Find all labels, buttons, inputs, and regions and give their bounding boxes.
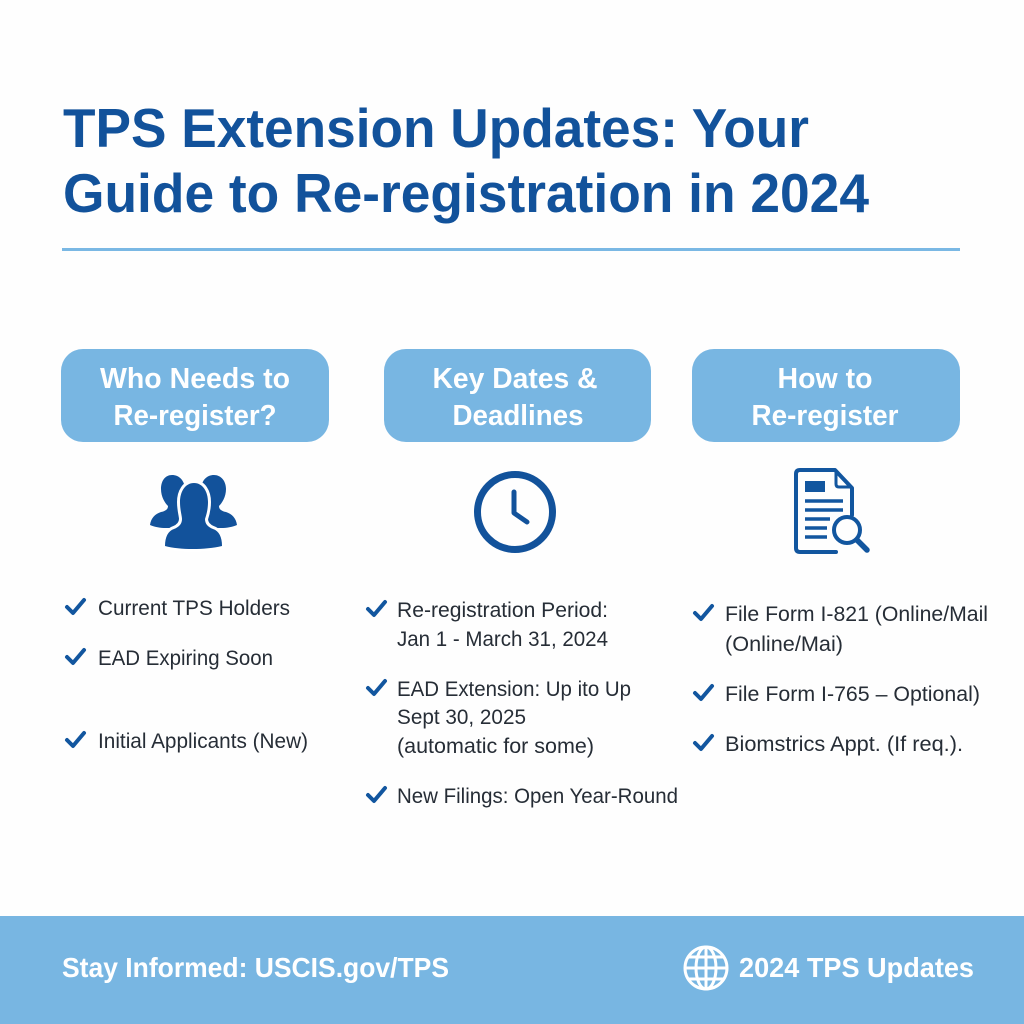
icon: document with magnifier bbox=[796, 470, 867, 552]
checklist: dates bbox=[368, 599, 678, 808]
checklist: dates: EAD Extension: Up ito Up bbox=[397, 678, 631, 701]
checklist: who bbox=[67, 597, 308, 753]
heading pill: how: How to bbox=[778, 363, 872, 395]
checklist: dates: New Filings: Open Year-Round bbox=[397, 785, 678, 808]
footer text: stay informed: Stay Informed: USCIS.gov/TPS bbox=[62, 952, 449, 983]
checklist: dates: (automatic for some) bbox=[397, 735, 594, 758]
checklist: who: Initial Applicants (New) bbox=[98, 730, 308, 753]
checklist: how: Biomstrics Appt. (If req.). bbox=[725, 733, 963, 756]
icon: people bbox=[150, 475, 237, 549]
checklist: dates: Jan 1 - March 31, 2024 bbox=[397, 628, 608, 651]
heading pill: dates: Deadlines bbox=[452, 400, 584, 432]
checklist: dates: Re-registration Period: bbox=[397, 599, 608, 622]
checklist: how: File Form I-765 – Optional) bbox=[725, 683, 980, 706]
heading pill: how: Re-register bbox=[752, 400, 898, 432]
icon: clock bbox=[478, 474, 552, 550]
checklist: who: EAD Expiring Soon bbox=[98, 647, 273, 670]
footer text: 2024 updates: 2024 TPS Updates bbox=[739, 952, 974, 983]
title: TPS Extension Updates: Your bbox=[63, 97, 809, 159]
title: Guide to Re-registration in 2024 bbox=[63, 162, 869, 224]
heading pill: dates bbox=[384, 349, 651, 442]
checklist: how bbox=[695, 603, 988, 756]
checklist: how: (Online/Mai) bbox=[725, 633, 843, 656]
heading pill: how bbox=[692, 349, 960, 442]
panel: key dates and deadlines bbox=[368, 349, 678, 808]
heading pill: dates: Key Dates & bbox=[432, 363, 598, 395]
panel: how to re-register bbox=[692, 349, 988, 756]
heading pill: who bbox=[61, 349, 329, 442]
title bbox=[63, 97, 869, 224]
heading pill: who: Re-register? bbox=[114, 400, 276, 432]
icon: globe bbox=[685, 947, 727, 989]
checklist: dates: Sept 30, 2025 bbox=[397, 706, 526, 729]
heading pill: who: Who Needs to bbox=[100, 363, 290, 395]
panel: who needs to re-register bbox=[61, 349, 329, 753]
footer band bbox=[0, 916, 1024, 1024]
checklist: who: Current TPS Holders bbox=[98, 597, 290, 620]
checklist: how: File Form I-821 (Online/Mail bbox=[725, 603, 988, 626]
